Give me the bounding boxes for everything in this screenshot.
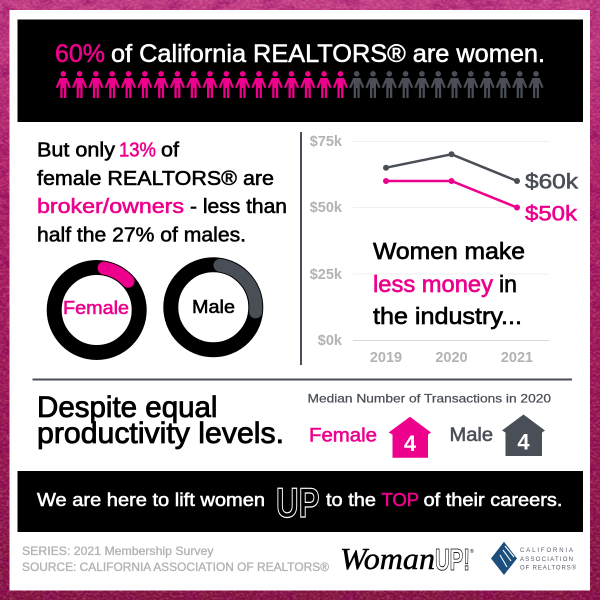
closing message: TOP [382, 489, 419, 510]
donut chart: male [171, 265, 256, 350]
heading: despite equal productivity: productivity levels. [37, 417, 284, 450]
pictogram: 18 pink figures of 30 [56, 71, 348, 98]
male end label: $60k [525, 170, 579, 194]
logo: WomanUP [340, 541, 474, 577]
text block: women make less money: Women make [373, 238, 525, 264]
icon: diamond emblem [491, 542, 517, 575]
logo: California Association of Realtors: CALIFORNIA [520, 548, 573, 554]
donut chart: male: Male [192, 296, 235, 317]
grid lines [353, 142, 549, 340]
panel: headline banner [18, 20, 583, 122]
transactions caption: Median Number of Transactions in 2020 [308, 392, 551, 406]
logo: California Association of Realtors [491, 542, 577, 575]
logo: WomanUP: ® [470, 548, 474, 555]
x axis labels: 2019 [370, 350, 402, 366]
UP outlined wordmark: UP [276, 479, 320, 526]
closing message: of their careers. [424, 489, 562, 510]
y axis labels: $50k [310, 200, 343, 216]
y axis labels [310, 134, 343, 349]
donut chart: female: Female [63, 297, 129, 318]
vertical divider [300, 132, 302, 365]
closing message [37, 479, 562, 526]
text block: women make less money: less money [373, 271, 493, 297]
female transactions: Female [309, 426, 377, 446]
text block: women make less money: in [499, 271, 517, 297]
logo: California Association of Realtors: ASSOCIATION [520, 557, 573, 563]
y axis labels: $0k [318, 333, 343, 349]
female transactions [309, 417, 431, 458]
y axis labels: $25k [310, 267, 343, 283]
horizontal divider [32, 378, 572, 380]
text block: broker owners: broker/owners [37, 196, 184, 218]
text block: broker owners: half the 27% of males. [37, 224, 246, 246]
text block: broker owners: 13% [119, 140, 156, 162]
logo: California Association of Realtors: OF REALTORS® [520, 564, 577, 572]
text block: women make less money: the industry... [373, 303, 522, 329]
panel: closing banner [18, 471, 583, 532]
heading: despite equal productivity [37, 391, 284, 450]
text block: broker owners: female REALTORS® are [37, 168, 274, 190]
donut chart: female [54, 268, 139, 352]
x axis labels: 2020 [435, 350, 468, 366]
closing message: to the [326, 489, 376, 510]
male transactions [450, 414, 545, 456]
male series [383, 151, 520, 184]
headline: of California REALTORS® are women. [111, 40, 545, 68]
logo: WomanUP: UP! [435, 542, 470, 577]
x axis labels: 2021 [501, 350, 533, 366]
icon: pink house: 4 [404, 431, 417, 456]
text block: women make less money [373, 238, 525, 329]
female end label: $50k [525, 202, 578, 226]
headline: 60% [55, 40, 105, 68]
closing message: We are here to lift women [37, 489, 265, 510]
pictogram: 12 gray figures of 30 [349, 71, 544, 98]
line chart: income [310, 134, 579, 366]
text block: broker owners: of [161, 140, 179, 162]
text block: broker owners: But only [37, 140, 115, 162]
text block: broker owners: - less than [190, 196, 287, 218]
female series [383, 178, 520, 210]
heading: despite equal productivity: Despite equal [37, 391, 218, 424]
logo: WomanUP: Woman [340, 541, 435, 576]
male transactions: Male [450, 425, 493, 446]
text block: broker owners [37, 140, 287, 246]
x axis labels [370, 350, 533, 366]
source note: SOURCE: CALIFORNIA ASSOCIATION OF REALTORS® [22, 560, 329, 574]
source note: SERIES: 2021 Membership Survey [22, 544, 214, 558]
icon: gray house: 4 [517, 430, 530, 454]
y axis labels: $75k [310, 134, 343, 150]
source note [22, 544, 329, 574]
